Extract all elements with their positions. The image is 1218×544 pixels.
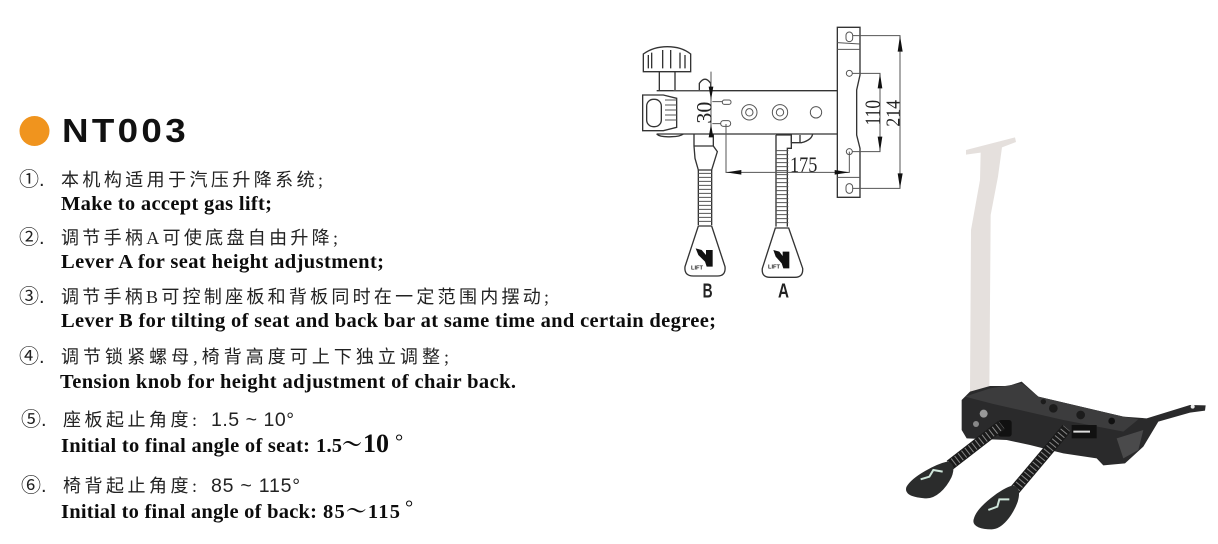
text block: item 1: ①. xyxy=(19,168,45,191)
dimension 110: 110 xyxy=(860,100,885,125)
text block: item 4: ④. xyxy=(19,345,45,368)
right lever xyxy=(974,428,1067,528)
text block: item 5: 1.5 ~ 10° xyxy=(211,409,294,431)
dimension 30 xyxy=(673,72,722,137)
text block: item 5: ° xyxy=(395,431,403,453)
text block: item 5: 10 xyxy=(363,429,389,458)
text block: item 4: Tension knob for height adjustment of chair back. xyxy=(60,371,516,393)
heading: NT003 with orange dot: NT003 xyxy=(62,112,189,149)
text block: item 4 xyxy=(19,345,516,393)
seat plate body xyxy=(962,382,1206,465)
dimension 30: 30 xyxy=(692,102,717,124)
mounting bar xyxy=(643,79,837,143)
dimension 175: 175 xyxy=(790,152,817,177)
dimension 175 xyxy=(726,124,849,177)
text block: item 5: ⑤. xyxy=(21,408,47,431)
technical drawing: mechanism with dimensions xyxy=(643,27,904,302)
text block: item 5: 座板起止角度: xyxy=(63,410,197,430)
text block: item 2 xyxy=(19,226,384,273)
text block: item 3 xyxy=(19,285,716,332)
text block: item 6: ° xyxy=(405,497,413,519)
text block: item 1: 本机构适用于汽压升降系统; xyxy=(61,170,323,190)
text block: item 5 xyxy=(21,408,403,458)
text block: item 2: ②. xyxy=(19,226,45,249)
mounting plate xyxy=(837,27,860,197)
backrest bar xyxy=(966,137,1016,395)
text block: item 6: ⑥. xyxy=(21,474,47,497)
lever B: LIFT xyxy=(691,265,703,271)
text block: item 5: ～ xyxy=(342,432,362,457)
text block: item 6: Initial to final angle of back: xyxy=(61,501,317,523)
product photo: chair tilt mechanism xyxy=(907,137,1206,528)
text block: item 4: 调节锁紧螺母,椅背高度可上下独立调整; xyxy=(61,347,449,367)
text block: item 6 xyxy=(21,474,413,523)
text block: item 6: 85 ~ 115° xyxy=(211,475,300,497)
dimension 214: 214 xyxy=(882,100,904,127)
label A: A xyxy=(778,279,789,302)
text block: item 3: Lever B for tilting of seat and back bar at same time and certain degree; xyxy=(61,310,716,332)
text block: item 1: Make to accept gas lift; xyxy=(61,193,272,215)
label B: B xyxy=(703,279,713,302)
text block: item 3: ③. xyxy=(19,285,45,308)
dimension 214 xyxy=(853,36,904,188)
lever A xyxy=(762,135,803,277)
lever B xyxy=(685,134,725,276)
left lever xyxy=(907,425,1002,497)
heading: NT003 with orange dot xyxy=(20,112,189,149)
text block: item 5: 1.5 xyxy=(316,435,342,457)
text block: item 2: 调节手柄A可使底盘自由升降; xyxy=(61,228,338,248)
text block: item 6: 椅背起止角度: xyxy=(63,476,197,496)
text block: item 6: 85～115 xyxy=(323,501,400,523)
tension knob xyxy=(643,47,691,90)
text block: item 1 xyxy=(19,168,323,215)
text block: item 5: Initial to final angle of seat: xyxy=(61,435,310,457)
lever A: LIFT xyxy=(768,265,780,271)
text block: item 2: Lever A for seat height adjustment; xyxy=(61,251,384,273)
dimension 110 xyxy=(852,73,885,152)
text block: item 3: 调节手柄B可控制座板和背板同时在一定范围内摆动; xyxy=(61,287,549,307)
